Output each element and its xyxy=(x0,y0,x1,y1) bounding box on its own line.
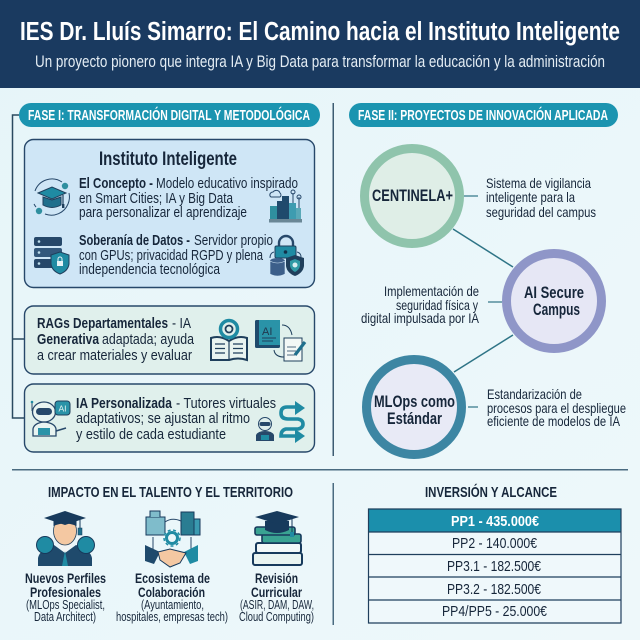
chain link: Centinela to AI Secure xyxy=(453,229,513,267)
text block: - Tutores virtuales xyxy=(176,395,276,412)
text: Nuevos Perfiles: Profesionales xyxy=(30,584,101,600)
node: AI Secure Campus: Campus xyxy=(533,300,580,319)
text: Nuevos Perfiles: Data Architect) xyxy=(34,610,96,624)
text block xyxy=(76,395,276,443)
node: MLOps como Estándar xyxy=(366,360,462,454)
callout: AI Secure Campus description: seguridad física y xyxy=(396,297,478,313)
text: Revisión Curricular xyxy=(239,570,314,624)
text: El Concepto: El Concepto - xyxy=(79,175,153,192)
icon: buildings, gear and handshake xyxy=(145,511,200,567)
text: Soberanía de Datos: con GPUs; privacidad RGPD y plena xyxy=(79,247,263,264)
icon: server with shield xyxy=(34,237,69,274)
heading pill: Fase I: FASE I: TRANSFORMACIÓN DIGITAL Y METODOLÓGICA xyxy=(28,106,310,124)
node: MLOps como Estándar: Estándar xyxy=(387,409,442,428)
icon: adaptive arrows xyxy=(281,401,305,443)
callout: CENTINELA+ description: seguridad del campus xyxy=(486,204,596,220)
text: Nuevos Perfiles: (MLOps Specialist, xyxy=(26,598,105,612)
chain link: AI Secure to MLOps xyxy=(454,335,513,372)
callout: AI Secure Campus description xyxy=(361,283,502,326)
icon: small robot xyxy=(256,418,274,441)
panel: RAGs Departamentales xyxy=(24,306,314,374)
text: Nuevos Perfiles xyxy=(25,570,106,624)
icon: AI book and document xyxy=(255,320,305,361)
text block: IA Personalizada xyxy=(76,395,173,412)
vertical divider between phases xyxy=(332,103,334,456)
heading: INVERSIÓN Y ALCANCE xyxy=(425,483,557,501)
icon: smart city xyxy=(269,190,302,222)
heading: IMPACTO EN EL TALENTO Y EL TERRITORIO xyxy=(48,484,293,501)
text: Revisión Curricular: (ASIR, DAM, DAW, xyxy=(240,598,314,612)
node: AI Secure Campus xyxy=(506,254,602,348)
icon: open book with knot xyxy=(211,320,247,360)
heading pill: Fase I xyxy=(19,103,320,127)
callout: CENTINELA+ description: Sistema de vigilancia xyxy=(486,175,591,191)
icon: lock, database and shield xyxy=(270,236,304,276)
callout: AI Secure Campus description: digital impulsada por IA xyxy=(361,310,480,326)
callout: MLOps description: Estandarización de xyxy=(487,386,582,402)
icon: AI book and document: AI xyxy=(262,326,272,338)
callout: AI Secure Campus description: Implementación de xyxy=(384,283,479,299)
vertical section divider xyxy=(332,483,334,625)
text: El Concepto xyxy=(79,175,298,221)
text: Ecosistema de Colaboración: (Ayuntamiento, xyxy=(141,598,204,612)
text: Ecosistema de Colaboración xyxy=(116,570,228,624)
table: investment: PP3.1 - 182.500€ xyxy=(447,558,542,575)
section: Inversión y alcance xyxy=(368,483,621,623)
node: MLOps como Estándar: MLOps como xyxy=(374,392,455,411)
table: investment: PP3.2 - 182.500€ xyxy=(447,581,542,598)
icon: AI robot tutor xyxy=(31,401,70,436)
callout: CENTINELA+ description xyxy=(464,175,596,220)
text: El Concepto: en Smart Cities; IA y Big Data xyxy=(79,190,234,207)
text: Revisión Curricular: Curricular xyxy=(251,584,302,600)
text block: a crear materiales y evaluar xyxy=(37,347,192,364)
text block: RAGs Departamentales xyxy=(37,315,168,332)
text: El Concepto: Modelo educativo inspirado xyxy=(156,175,298,192)
text block: y estilo de cada estudiante xyxy=(76,426,226,443)
text block: adaptativos; se ajustan al ritmo xyxy=(76,410,250,427)
text block xyxy=(37,315,195,364)
table: investment: PP4/PP5 - 25.000€ xyxy=(442,603,548,620)
node: CENTINELA+ xyxy=(364,148,460,244)
phase I connector lines xyxy=(12,115,24,418)
text: Soberanía de Datos: independencia tecnológica xyxy=(79,261,221,278)
table: investment xyxy=(368,509,621,623)
text block: Generativa xyxy=(37,331,100,348)
icon: books with cap xyxy=(253,511,302,565)
text block: - IA xyxy=(172,315,191,332)
text: Revisión Curricular: Revisión xyxy=(255,570,298,586)
panel: Instituto Inteligente xyxy=(24,140,314,288)
text: Ecosistema de Colaboración: hospitales, empresas tech) xyxy=(116,610,228,624)
text: Soberanía de Datos: Servidor propio xyxy=(194,232,273,249)
text: Soberanía de Datos xyxy=(79,232,273,278)
text: Ecosistema de Colaboración: Colaboración xyxy=(138,584,205,600)
text: Nuevos Perfiles: Nuevos Perfiles xyxy=(25,570,106,586)
panel heading: Instituto Inteligente xyxy=(99,148,237,170)
icon: AI robot tutor: AI xyxy=(58,404,67,414)
text: Ecosistema de Colaboración: Ecosistema de xyxy=(135,570,210,586)
horizontal section divider xyxy=(12,469,628,470)
header banner xyxy=(0,0,640,88)
panel: IA Personalizada xyxy=(24,384,314,452)
icon: professional with cap xyxy=(36,511,94,566)
node: AI Secure Campus: AI Secure xyxy=(524,283,584,302)
section: Impacto en el talento y el territorio xyxy=(25,484,314,624)
text: Soberanía de Datos: Soberanía de Datos - xyxy=(79,232,190,249)
table: investment: PP1 - 435.000€ xyxy=(451,513,540,530)
callout: CENTINELA+ description: inteligente para la xyxy=(486,189,575,205)
text block: adaptada; ayuda xyxy=(102,331,195,348)
icon: graduation cap orbit xyxy=(34,179,69,215)
heading pill: Fase II xyxy=(349,103,618,127)
node: CENTINELA+: CENTINELA+ xyxy=(372,186,453,205)
text: El Concepto: para personalizar el aprendizaje xyxy=(79,204,247,221)
table: investment: PP2 - 140.000€ xyxy=(452,535,538,552)
callout: MLOps description xyxy=(468,386,626,429)
text: Revisión Curricular: Cloud Computing) xyxy=(239,610,314,624)
